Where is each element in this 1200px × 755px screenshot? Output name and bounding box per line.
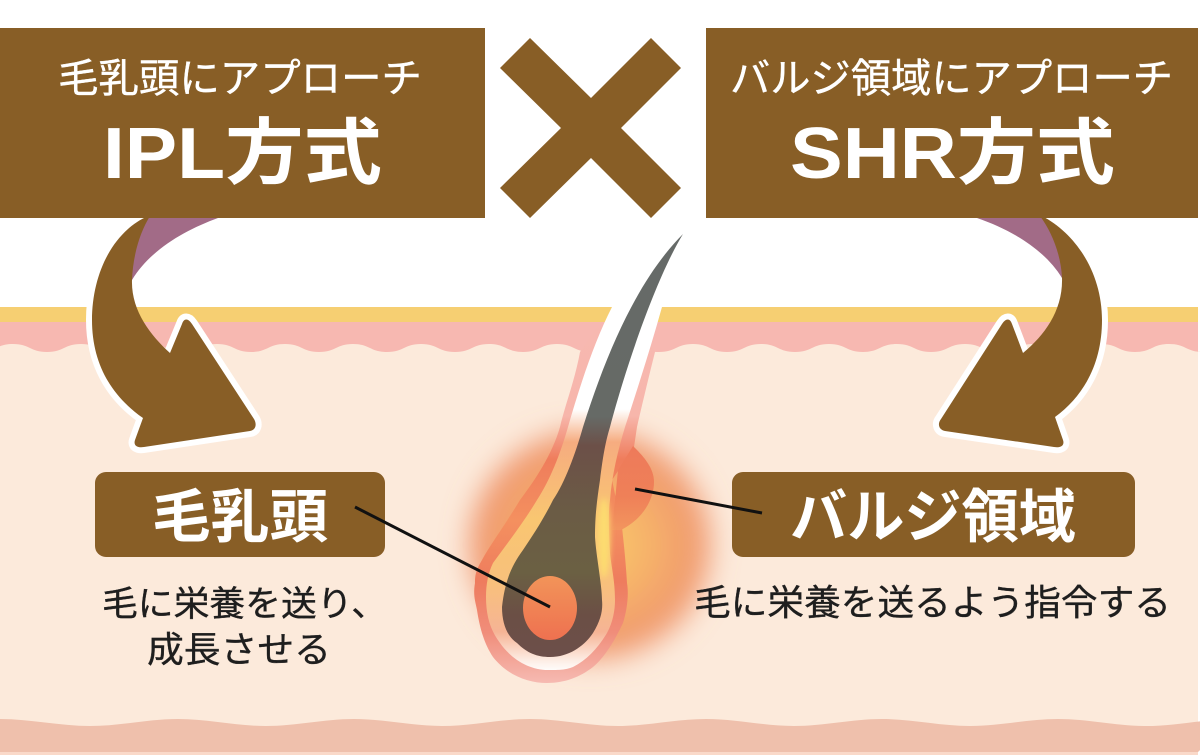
label: hair papilla bbox=[95, 472, 385, 557]
description: bulge: 毛に栄養を送るよう指令する bbox=[694, 582, 1171, 623]
hair shaft bbox=[502, 234, 683, 657]
subtitle: バルジ領域にアプローチ bbox=[730, 57, 1173, 101]
leader line: bulge bbox=[635, 489, 762, 513]
follicle outer band bbox=[474, 322, 655, 683]
curved arrow: SHR to bulge bbox=[939, 216, 1102, 447]
white outline left bbox=[92, 218, 256, 447]
heat glow bbox=[470, 431, 710, 659]
white outline right bbox=[939, 218, 1102, 447]
yellow highlight in sheath bbox=[598, 498, 610, 578]
arrow body left bbox=[92, 216, 256, 447]
follicle inner sheath bbox=[486, 307, 662, 670]
header panel: IPL bbox=[0, 28, 485, 218]
title: IPL方式 bbox=[103, 114, 382, 194]
dermal papilla bbox=[523, 576, 577, 640]
skin cross-section background bbox=[0, 307, 1200, 755]
description: papilla: 成長させる bbox=[147, 629, 331, 670]
bulge region bbox=[612, 446, 654, 530]
hair follicle with heat glow bbox=[470, 234, 710, 683]
cross mark bbox=[500, 38, 681, 218]
arrow body right bbox=[939, 216, 1102, 447]
description: papilla bbox=[102, 585, 387, 670]
label: bulge region bbox=[732, 472, 1135, 557]
title: SHR方式 bbox=[790, 114, 1115, 194]
purple inner ribbon left bbox=[125, 218, 218, 280]
label: bulge region: バルジ領域 bbox=[790, 485, 1076, 550]
leader line: papilla bbox=[355, 507, 550, 607]
curved arrow: IPL to hair papilla bbox=[92, 216, 256, 447]
purple inner ribbon right bbox=[977, 218, 1070, 278]
header panel: SHR bbox=[706, 28, 1198, 218]
label: hair papilla: 毛乳頭 bbox=[152, 485, 328, 550]
description: papilla: 毛に栄養を送り、 bbox=[102, 585, 387, 624]
subtitle: 毛乳頭にアプローチ bbox=[58, 57, 422, 101]
